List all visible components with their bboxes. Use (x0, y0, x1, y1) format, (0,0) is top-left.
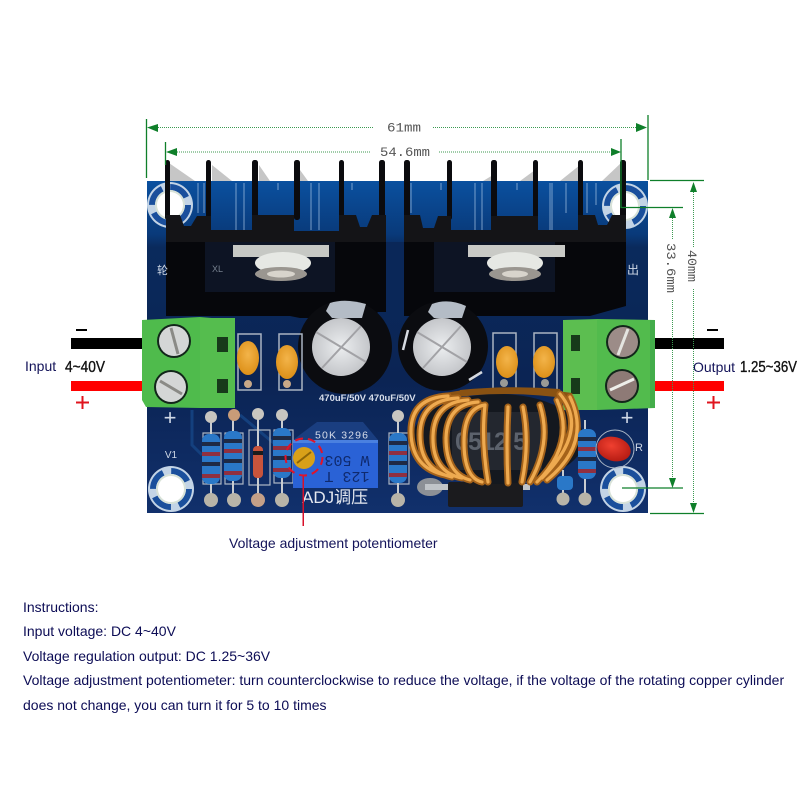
power diode (417, 478, 530, 507)
label: input: Input (25, 358, 56, 374)
circuit board: V1 (165, 450, 178, 461)
circuit board: 470uF/50V 470uF/50V (319, 393, 416, 404)
potentiometer (286, 430, 378, 507)
dimension: 33.6mm (622, 208, 683, 488)
inductor coil (411, 390, 584, 484)
right-side resistors (556, 420, 596, 506)
dimension: 40mm: 40mm (684, 250, 699, 282)
left capacitor (298, 300, 392, 394)
instructions text block: Voltage regulation output: DC 1.25~36V (23, 648, 270, 664)
input plus sign (76, 396, 89, 409)
input black wire (71, 338, 142, 349)
output minus sign (707, 329, 718, 331)
instructions text block: does not change, you can turn it for 5 to 10 times (23, 697, 327, 713)
label: output: Output (693, 359, 735, 375)
dimension: 61mm (146, 115, 648, 180)
instructions text block: Input voltage: DC 4~40V (23, 623, 176, 639)
dimension: 61mm: 61mm (387, 120, 421, 136)
dimension: 54.6mm: 54.6mm (380, 145, 430, 160)
heatsink shadow triangles (169, 162, 622, 181)
left heatsink: 轮 (157, 263, 168, 277)
label: potentiometer caption: Voltage adjustment potentiometer (229, 535, 438, 551)
potentiometer: 123 T (324, 467, 370, 484)
LED indicator (594, 430, 634, 468)
instructions text block: Voltage adjustment potentiometer: turn counterclockwise to reduce the voltage, if the voltage of the rotating copper cylinder (23, 672, 784, 688)
potentiometer: 50K 3296 (315, 430, 368, 442)
inductor coil: 0512 5 (455, 428, 527, 456)
dimension: 54.6mm (166, 139, 683, 208)
dimension: 33.6mm: 33.6mm (663, 243, 678, 293)
circuit board (147, 181, 648, 513)
dimension: 40mm (650, 180, 704, 514)
instructions text block (23, 599, 784, 713)
left heatsink (157, 160, 386, 318)
input minus sign (76, 329, 87, 331)
right heatsink: 出 (627, 263, 639, 277)
left heatsink: XL (212, 264, 223, 274)
potentiometer: ADJ调压 (302, 488, 368, 507)
red leader line (302, 476, 304, 526)
resistors and diode (202, 408, 409, 507)
right heatsink (404, 160, 639, 316)
output plus sign (707, 396, 720, 409)
input red wire (71, 381, 142, 391)
instructions text block: Instructions: (23, 599, 98, 615)
output red wire (655, 381, 724, 391)
product diagram (26, 115, 798, 551)
right capacitor (398, 301, 488, 391)
output black wire (655, 338, 724, 349)
right terminal block (563, 319, 655, 410)
circuit board: R (635, 442, 643, 454)
potentiometer: W 503 (324, 451, 370, 468)
left terminal block (142, 317, 235, 408)
yellow capacitors (237, 333, 557, 390)
label: input voltage: 4~40V (65, 359, 106, 376)
circuit board: + (164, 405, 176, 430)
circuit board: + (621, 405, 633, 430)
